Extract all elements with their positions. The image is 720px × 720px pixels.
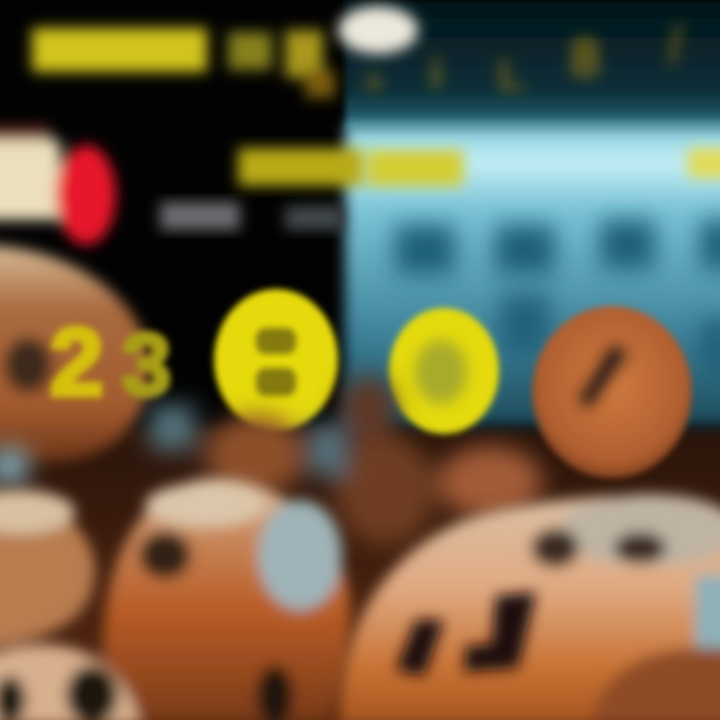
- top left lottery ball: [0, 245, 150, 462]
- subtitle grey text: [160, 202, 343, 230]
- lower left lottery balls: [0, 478, 350, 720]
- yellow numbers 2 3: 3: [122, 315, 171, 414]
- title text, blurred yellow: L: [498, 51, 525, 100]
- title text, blurred yellow: [32, 16, 682, 100]
- title text, blurred yellow: a: [365, 64, 382, 97]
- title text, blurred yellow: i: [430, 49, 442, 98]
- yellow numbers 2 3: 2: [50, 309, 103, 416]
- blue panel columns: [395, 220, 720, 380]
- yellow numbers 2 3: [50, 309, 171, 416]
- lower right lottery ball: [340, 494, 720, 720]
- title text, blurred yellow: /: [668, 16, 682, 74]
- yellow ball 8: [214, 289, 338, 431]
- white highlight blob: [338, 6, 418, 54]
- subtitle yellow text: [238, 148, 720, 186]
- orange ball with number: [532, 306, 692, 478]
- title text, blurred yellow: 8: [570, 28, 600, 88]
- small background balls: [0, 376, 542, 545]
- yellow ball 0: [389, 308, 499, 434]
- number on lower right ball: [396, 592, 536, 676]
- red and cream capsule: [0, 126, 116, 245]
